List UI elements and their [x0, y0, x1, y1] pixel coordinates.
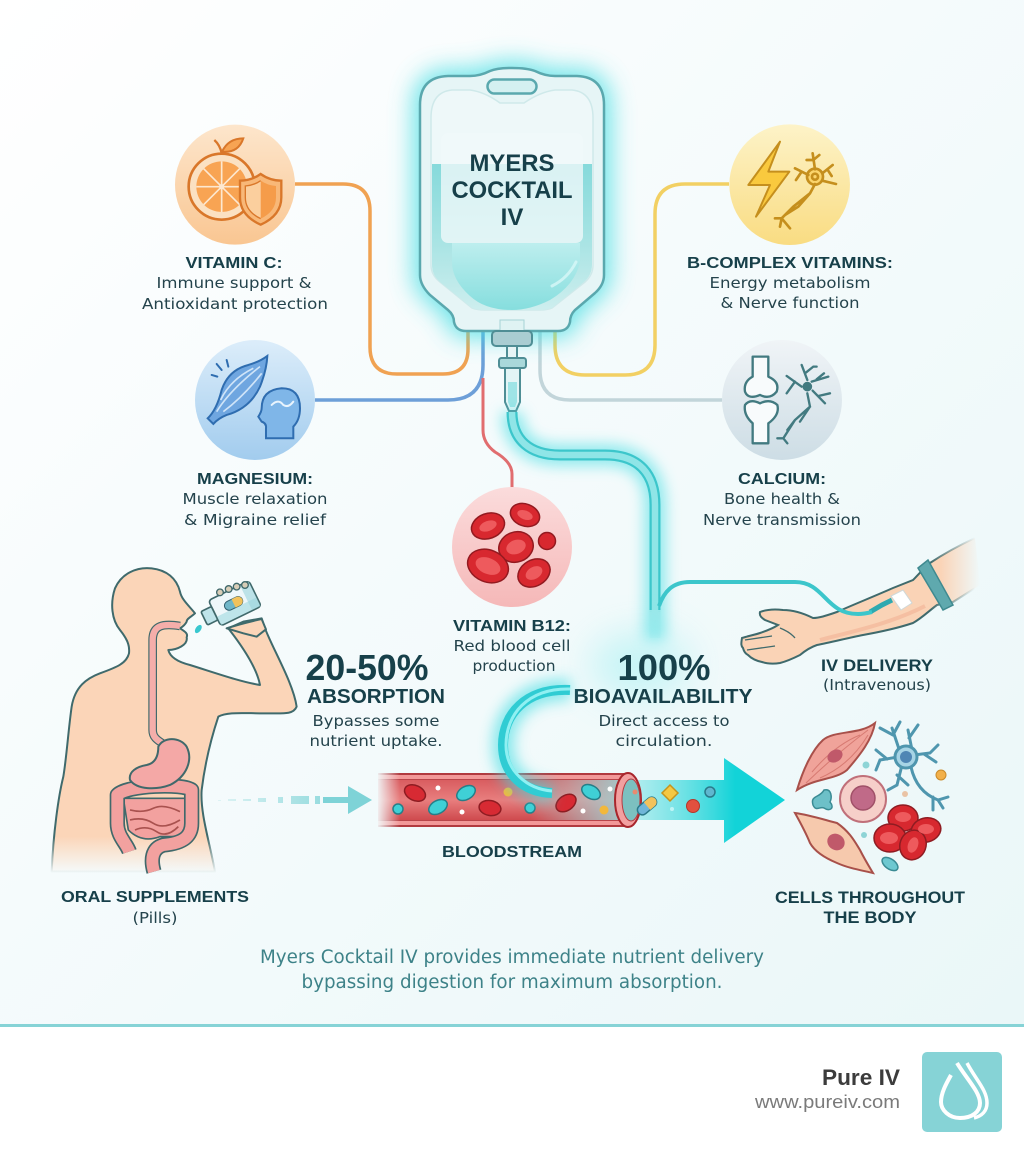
brand text [754, 1065, 900, 1112]
text: oral supplements: ORAL SUPPLEMENTS [61, 889, 249, 906]
text: cells throughout the body [775, 888, 966, 927]
vessel opening [615, 773, 641, 827]
brand text: www.pureiv.com [754, 1092, 900, 1112]
text: cells throughout the body: CELLS THROUGHOUT [775, 888, 966, 907]
text: magnesium: MAGNESIUM: [197, 471, 313, 488]
handle slot [488, 80, 536, 94]
summary text: Myers Cocktail IV provides immediate nutrient delivery [260, 947, 764, 968]
neuron [777, 365, 830, 443]
head [258, 388, 300, 438]
arm band [918, 560, 953, 610]
bone joint [745, 357, 778, 443]
liquid highlight [552, 262, 576, 286]
esophagus [153, 625, 180, 747]
vessel lumen [378, 780, 628, 820]
text: vitamin B12 [453, 618, 571, 675]
text: oral supplements: (Pills) [132, 909, 178, 927]
text: calcium: CALCIUM: [738, 471, 826, 488]
stat: 100% bioavailability: Direct access to [598, 712, 730, 730]
stat: 100% bioavailability: circulation. [616, 732, 712, 750]
hand [227, 619, 266, 637]
bag glow [420, 68, 604, 331]
text: IV delivery: IV DELIVERY [821, 656, 934, 675]
lightning bolt [748, 142, 789, 217]
dots and pills [861, 762, 946, 873]
text: IV delivery [821, 656, 934, 694]
logo [922, 1052, 1002, 1132]
arm shade [820, 606, 925, 640]
text: B-complex: & Nerve function [720, 294, 860, 312]
tape [891, 590, 912, 610]
catheter [870, 600, 892, 612]
large intestine [117, 786, 192, 872]
blob [812, 790, 832, 810]
connector: calcium [540, 330, 722, 400]
text: magnesium: & Migraine relief [184, 511, 327, 529]
text: magnesium: Muscle relaxation [182, 490, 328, 508]
text: IV delivery: (Intravenous) [823, 676, 931, 694]
small intestine [123, 798, 187, 839]
text: calcium [703, 471, 861, 529]
muscle cell [797, 723, 875, 790]
connector: vitamin B12 [483, 378, 512, 488]
spindle cell [795, 813, 873, 873]
port [500, 320, 524, 331]
text: cells throughout the body: THE BODY [824, 908, 917, 927]
footer [0, 1024, 1024, 1154]
stat: 100% bioavailability: 100% [618, 647, 710, 688]
icon: magnesium circle [195, 340, 315, 460]
icon: red blood cells circle [452, 487, 572, 607]
arm with IV [741, 538, 980, 664]
label text: COCKTAIL [452, 177, 572, 204]
stat: 20-50% absorption: ABSORPTION [307, 686, 445, 708]
connector cap [492, 331, 532, 346]
cells [463, 500, 556, 593]
cells cluster [795, 722, 948, 873]
pill bottle [198, 581, 261, 631]
stat: 100% bioavailability [574, 647, 753, 750]
curved IV entry tube [503, 689, 570, 793]
dashed arrow from supplements [218, 786, 372, 814]
brand text: Pure IV [822, 1065, 900, 1090]
connector: magnesium [315, 330, 483, 400]
collar [499, 358, 526, 368]
text: B-complex: B-COMPLEX VITAMINS: [687, 255, 893, 272]
red cells [874, 805, 944, 864]
connector: B-complex [555, 184, 729, 375]
muscle [208, 356, 267, 424]
text: oral supplements [61, 889, 249, 927]
bag body [420, 68, 604, 331]
shield [240, 174, 281, 225]
finger lines [745, 628, 795, 650]
stat: 20-50% absorption: nutrient uptake. [310, 732, 442, 750]
motion lines [212, 360, 228, 377]
neuron [775, 153, 836, 228]
text: vitamin B12: VITAMIN B12: [453, 618, 571, 635]
vessel wall [378, 773, 628, 827]
glow behind curved tube [590, 633, 690, 697]
text: vitamin C: VITAMIN C: [186, 255, 282, 272]
icon: calcium circle [722, 340, 842, 460]
particles in arrow [635, 785, 715, 817]
orange fruit [189, 138, 255, 220]
stat: 100% bioavailability: BIOAVAILABILITY [574, 686, 753, 708]
summary text: bypassing digestion for maximum absorption. [302, 972, 722, 993]
bag inner chamber [431, 90, 593, 310]
connector: vitamin C [295, 184, 468, 374]
icon: B-complex circle [729, 124, 850, 245]
bloodstream vessel [376, 771, 641, 829]
branch tube to arm [659, 582, 872, 614]
IV bag [420, 68, 604, 411]
blood cells in vessel [402, 782, 579, 817]
main IV tube [512, 412, 660, 640]
summary text [260, 947, 764, 993]
label text [452, 150, 572, 231]
neck [507, 346, 517, 358]
text: vitamin C [142, 255, 328, 313]
text: magnesium [182, 471, 328, 529]
text: bloodstream: BLOODSTREAM [442, 844, 582, 861]
text: calcium: Bone health & [724, 490, 840, 508]
neuron [876, 722, 948, 810]
text: calcium: Nerve transmission [703, 511, 861, 529]
arrow to cells [625, 758, 785, 843]
stat: 20-50% absorption: 20-50% [306, 647, 428, 688]
body silhouette [52, 568, 297, 872]
round cell [840, 776, 886, 822]
label text: MYERS [470, 150, 554, 177]
text: vitamin C: Immune support & [156, 274, 312, 292]
label [441, 133, 583, 243]
icon: vitamin C circle [175, 125, 295, 245]
falling pill [193, 624, 203, 634]
text: B-complex [687, 255, 893, 312]
text: vitamin B12: production [472, 657, 556, 675]
stat: 20-50% absorption: Bypasses some [312, 712, 440, 730]
liquid [432, 164, 592, 310]
text: vitamin C: Antioxidant protection [142, 295, 328, 313]
stat: 20-50% absorption [306, 647, 445, 750]
figure: person drinking [52, 568, 297, 872]
liquid bowl [452, 243, 580, 310]
forearm [741, 538, 980, 664]
stomach [130, 739, 189, 788]
drip chamber [505, 368, 520, 411]
text: vitamin B12: Red blood cell [454, 637, 570, 655]
pills in bottle top [217, 582, 248, 596]
text: B-complex: Energy metabolism [710, 274, 870, 292]
label text: IV [501, 204, 523, 231]
